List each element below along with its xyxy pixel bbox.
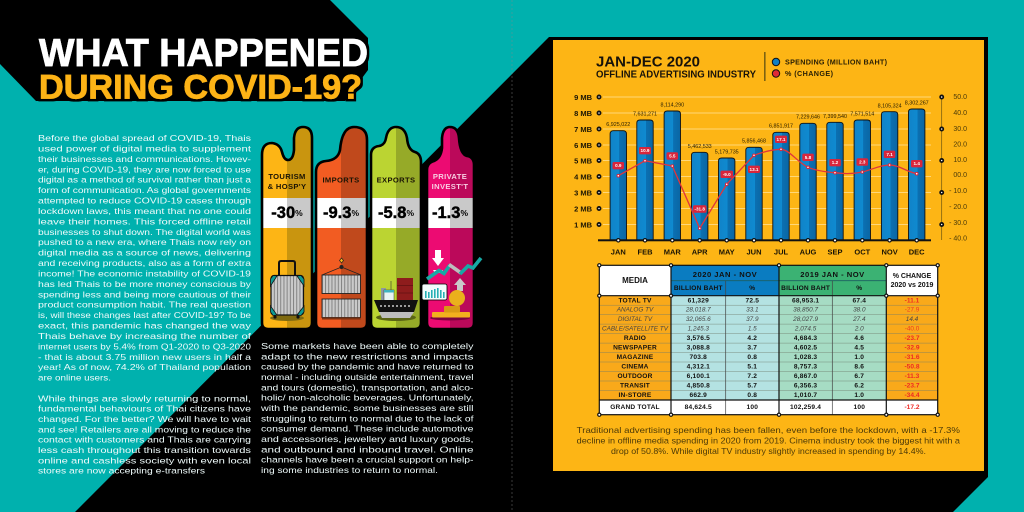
text block: markets paragraph — [260, 341, 474, 475]
label: imports: IMPORTS — [322, 176, 360, 184]
percent change tags: -31.8 — [694, 206, 705, 212]
bar value labels: 5,462,533 — [688, 144, 712, 150]
table rows: 6,356.3 — [794, 382, 817, 390]
left axis labels: 7 MB — [574, 125, 593, 134]
percent change tags: 5.5 — [669, 154, 676, 158]
table rows: 1,010.7 — [794, 392, 817, 399]
text block: COVID-19 digital behaviour, first paragraph: lockdown laws, this meant that no one could — [38, 206, 251, 216]
percent change tags: 10.9 — [641, 148, 650, 153]
percent change tags — [612, 136, 922, 213]
value: exports: -5.8% — [378, 204, 414, 222]
table fills — [599, 265, 938, 415]
table rows: 1.0 — [854, 392, 864, 399]
table rows: 61,329 — [688, 298, 709, 304]
panel: private investment bottle — [422, 120, 481, 335]
bar value labels: 6,851,917 — [769, 124, 793, 130]
table rows: 68,953.1 — [792, 298, 819, 304]
text block: second paragraph: stores are now accepting e-transfers — [38, 466, 205, 476]
table headers: % CHANGE — [893, 273, 932, 280]
percent change tags: 13.1 — [750, 167, 759, 172]
text block: COVID-19 digital behaviour, first paragraph: exact, this pandemic has changed the way — [38, 321, 252, 331]
legend: % (CHANGE) — [785, 69, 834, 78]
text block: COVID-19 digital behaviour, first paragraph: their businesses and communications. Howev- — [38, 154, 251, 164]
right axis: 10.0 — [953, 157, 967, 164]
value: tourism: -30% — [271, 204, 303, 222]
text block: second paragraph: contact with customers and Thais are carrying — [38, 435, 251, 445]
bar value labels: 6,925,022 — [606, 122, 630, 128]
table rows: TOTAL TV — [618, 298, 652, 304]
text block: COVID-19 digital behaviour, first paragraph: is, will these changes last after COVID-19? To be — [38, 310, 251, 320]
text block: COVID-19 digital behaviour, first paragraph: has led Thais to be more money conscious by — [38, 279, 252, 289]
panel: exports bottle — [370, 126, 422, 328]
table rows: 1,245.3 — [688, 326, 709, 333]
label: tourism: & HOSP'Y — [268, 182, 306, 190]
bar value labels: 5,856,468 — [742, 139, 766, 145]
text block: COVID-19 digital behaviour, first paragraph: income! The economic instability of COVID-19 — [38, 268, 251, 278]
table rows: -27.9 — [905, 307, 920, 314]
table rows: 8,757.3 — [794, 364, 817, 370]
title — [39, 32, 368, 106]
table rows: 3.7 — [747, 344, 757, 352]
text block: chart commentary: decline in offline media spending in 2020 from 2019. Cinema industry took the biggest hit with a — [577, 436, 960, 446]
table rows: 1.0 — [854, 354, 864, 361]
label: private investment: PRIVATE — [433, 172, 467, 180]
text block: COVID-19 digital behaviour, first paragraph — [38, 133, 252, 383]
bar value labels: 7,399,540 — [823, 114, 847, 120]
text block: markets paragraph: and tours (domestic), transportation, and alco- — [261, 382, 474, 392]
table rows — [602, 298, 920, 411]
label: exports: EXPORTS — [377, 176, 415, 184]
text block: COVID-19 digital behaviour, first paragraph: attempted to reduce COVID-19 cases through — [38, 196, 251, 206]
table rows: 3,088.8 — [687, 344, 710, 352]
table headers: 2020 vs 2019 — [891, 282, 934, 289]
right axis: - 10.0 — [949, 188, 967, 195]
table headers: % — [856, 285, 862, 292]
title: DURING COVID-19? — [39, 68, 362, 106]
table rows: -40.0 — [905, 326, 920, 333]
table rows: 3,576.5 — [687, 335, 710, 342]
x axis with month labels: JUL — [774, 248, 789, 256]
text block: second paragraph: fundamental behaviours of Thai citizens have — [38, 404, 251, 414]
percent change tags: 2.3 — [859, 160, 866, 164]
bar value labels: 7,229,646 — [796, 115, 820, 121]
data table: media spending 2020 vs 2019 — [598, 264, 939, 416]
table rows: 4,850.8 — [687, 382, 710, 390]
table rows: 38,850.7 — [793, 307, 818, 314]
table rows: 33.1 — [746, 307, 759, 314]
bar value labels: 8,302,267 — [905, 100, 929, 106]
table rows: 703.8 — [690, 354, 707, 361]
text block: markets paragraph: adapt to the new restrictions and impacts — [261, 351, 474, 361]
table rows: 14.4 — [906, 316, 919, 323]
right axis: 00.0 — [953, 172, 967, 179]
panel: tourism and hospitality bottle — [260, 126, 314, 328]
legend: SPENDING (MILLION BAHT) — [785, 58, 888, 67]
right axis: 30.0 — [953, 126, 967, 133]
percent change tags: 7.1 — [886, 152, 893, 157]
text block: COVID-19 digital behaviour, first paragraph: leave their homes. This forced offline retail — [38, 216, 251, 226]
text block: COVID-19 digital behaviour, first paragraph: pushed to a new era, where Thais now rely on — [38, 237, 251, 247]
value: private investment: -1.3% — [432, 204, 468, 222]
text block: markets paragraph: holic/ non-alcoholic beverages. Unfortunately, — [261, 393, 474, 403]
table rows: 4.5 — [854, 344, 864, 352]
table rows: -11.3 — [905, 373, 920, 380]
left axis labels: 1 MB — [574, 220, 593, 230]
left axis labels: 2 MB — [574, 204, 593, 214]
table rows: 4.2 — [747, 335, 757, 342]
left axis labels: 4 MB — [574, 172, 593, 182]
text block: markets paragraph: struggling to return to normal due to the lack of — [261, 413, 474, 423]
table rows: MAGAZINE — [617, 354, 654, 361]
value: imports: -9.3% — [323, 204, 359, 222]
icon: investment trend chart and coins — [422, 250, 481, 320]
table rows: 102,259.4 — [790, 404, 821, 411]
text block: COVID-19 digital behaviour, first paragraph: Thais behave by increasing the number of — [38, 331, 252, 341]
text block: markets paragraph: Some markets have been able to completely — [261, 341, 474, 351]
text block: COVID-19 digital behaviour, first paragraph: form of communication. As global governments — [38, 185, 251, 195]
left axis labels: 9 MB — [574, 93, 593, 102]
table rows: 38.0 — [853, 307, 866, 314]
table rows: ANALOG TV — [616, 307, 654, 314]
label: private investment: INVEST'T — [432, 182, 468, 190]
text block: markets paragraph: channels have been a crucial support on help- — [261, 455, 474, 465]
table rows: -23.7 — [904, 382, 920, 390]
table rows: NEWSPAPER — [613, 344, 657, 352]
bars — [610, 109, 925, 240]
text block: chart commentary: drop of 50.8%. While digital TV industry slightly increased in spending by 14.4%. — [611, 446, 926, 456]
chart heading — [596, 54, 756, 80]
x axis with month labels: AUG — [800, 248, 816, 256]
table rows: 32,065.6 — [686, 316, 711, 323]
right axis: 20.0 — [953, 142, 967, 148]
table rows: DIGITAL TV — [618, 316, 653, 323]
icon: hanging cargo containers — [322, 258, 361, 320]
text block: COVID-19 digital behaviour, first paragraph: - that is about 3.75 million new users in half a — [38, 352, 251, 362]
text block: second paragraph: less cash throughout this transition towards — [38, 445, 251, 455]
text block: chart commentary — [577, 425, 960, 456]
table rows: 67.4 — [852, 298, 866, 304]
table rows: -11.1 — [905, 298, 920, 304]
table rows: -17.2 — [904, 404, 920, 411]
text block: second paragraph: changed. For the better? We will have to wait — [38, 414, 252, 424]
table rows: 7.2 — [747, 373, 757, 380]
right axis: - 30.0 — [949, 220, 967, 227]
bar value labels: 7,571,514 — [850, 111, 874, 117]
table rows: 2.0 — [854, 326, 864, 333]
text block: second paragraph: online and cashless society with even local — [38, 455, 251, 465]
left axis labels: 3 MB — [574, 188, 593, 198]
left axis labels: 6 MB — [574, 141, 593, 150]
table headers: % — [749, 285, 755, 292]
text block: markets paragraph: and accessories, jewellery and luxury goods, — [261, 434, 474, 444]
x axis with month labels: FEB — [638, 248, 653, 256]
table rows: CABLE/SATELLITE TV — [602, 326, 669, 333]
right axis — [940, 94, 967, 242]
table rows: 100 — [746, 404, 758, 411]
text block: COVID-19 digital behaviour, first paragraph: are online users. — [38, 373, 111, 383]
text block: COVID-19 digital behaviour, first paragraph: spending less and being more cautious of their — [38, 289, 251, 299]
table rows: 4,312.1 — [687, 364, 710, 370]
table rows: 4.6 — [854, 335, 864, 342]
table headers: BILLION BAHT — [781, 285, 830, 292]
label: tourism: TOURISM — [268, 172, 306, 180]
table rows: GRAND TOTAL — [610, 404, 660, 411]
table headers: 2019 JAN - NOV — [800, 270, 865, 279]
table headers — [622, 270, 934, 292]
percent change line — [617, 148, 918, 230]
table rows: 6,867.0 — [794, 373, 817, 380]
percent change tags: -9.0 — [723, 172, 731, 177]
combo chart: spending bars and percent change line — [574, 93, 967, 256]
text block: markets paragraph: ing some industries to return to normal. — [261, 465, 438, 475]
left axis labels: 5 MB — [574, 156, 593, 166]
x axis with month labels: DEC — [909, 248, 925, 256]
text block: markets paragraph: and outbound and inbound travel. Online — [261, 444, 474, 454]
text block: markets paragraph: caused by the pandemic and have returned to — [261, 362, 474, 372]
percent change tags: 1.4 — [914, 161, 920, 166]
table rows: 5.7 — [747, 382, 757, 390]
table rows: 37.9 — [746, 316, 759, 323]
table rows: -31.6 — [904, 354, 920, 361]
percent change tags: 0.9 — [615, 163, 622, 168]
text block: COVID-19 digital behaviour, first paragraph: Before the global spread of COVID-19, Thais — [38, 133, 251, 143]
x axis with month labels: OCT — [854, 248, 871, 256]
table rows: IN-STORE — [618, 392, 652, 399]
percent change tags: 17.1 — [777, 137, 786, 142]
table rows: 6,100.1 — [687, 373, 710, 380]
background: black title block — [0, 0, 368, 101]
text block: COVID-19 digital behaviour, first paragraph: and receiving products, also as a form of extra — [38, 258, 251, 268]
text block: markets paragraph: normal - including outside entertainment, travel — [261, 372, 474, 382]
table rows: -32.9 — [904, 344, 920, 352]
left axis labels: 8 MB — [574, 109, 593, 118]
x axis with month labels: APR — [692, 248, 708, 256]
bar value labels — [606, 100, 929, 156]
table rows: 0.8 — [747, 354, 757, 361]
table rows: 72.5 — [745, 298, 759, 304]
x axis with month labels: SEP — [827, 248, 843, 256]
table headers: BILLION BAHT — [674, 285, 723, 292]
text block: second paragraph: and see! Retailers are all moving to reduce the — [38, 424, 251, 434]
text block: second paragraph — [38, 393, 252, 476]
right axis: 40.0 — [953, 110, 967, 117]
text block: COVID-19 digital behaviour, first paragraph: internet users by 5.4% from Q1-2020 to Q3-2020 — [38, 341, 251, 351]
table rows: 662.9 — [690, 392, 707, 399]
table rows: TRANSIT — [620, 382, 650, 390]
table rows: 8.6 — [854, 364, 864, 370]
table rows: -34.4 — [904, 392, 920, 399]
x axis with month labels — [598, 239, 931, 256]
table rows: 6.2 — [854, 382, 864, 390]
percent change tags: 1.2 — [832, 160, 839, 165]
text block: markets paragraph: with the pandemic, some businesses are still — [260, 403, 474, 413]
right axis: 50.0 — [953, 94, 967, 101]
text block: COVID-19 digital behaviour, first paragraph: year! As of now, 74.2% of Thailand population — [38, 362, 251, 372]
table rows: 1.5 — [748, 326, 757, 333]
text block: second paragraph: While things are slowly returning to normal, — [38, 393, 251, 403]
right axis: - 20.0 — [949, 204, 967, 211]
table rows: 0.8 — [747, 392, 757, 399]
table rows: RADIO — [624, 335, 646, 342]
text block: COVID-19 digital behaviour, first paragraph: used power of digital media to supplement — [38, 143, 252, 153]
table rows: 28,018.7 — [685, 307, 711, 314]
chart heading: JAN-DEC 2020 — [596, 54, 700, 70]
table rows: 5.1 — [747, 364, 757, 370]
text block: COVID-19 digital behaviour, first paragraph: er, during COVID-19, they are now forced to use — [38, 164, 251, 174]
x axis with month labels: MAY — [719, 248, 735, 256]
table rows: 6.7 — [854, 373, 864, 380]
icon: cargo ship — [374, 278, 418, 321]
text block: COVID-19 digital behaviour, first paragraph: product consumption habit. The real question — [38, 300, 251, 310]
text block: markets paragraph: consumer demand. These include automotive — [261, 424, 474, 434]
x axis with month labels: JAN — [611, 248, 626, 256]
table rows: 4,684.3 — [794, 335, 817, 342]
table rows: 100 — [853, 404, 865, 411]
right axis: - 40.0 — [949, 236, 967, 242]
bar value labels: 8,114,290 — [661, 103, 684, 109]
text block: COVID-19 digital behaviour, first paragraph: digital media as a source of news, delivering — [38, 248, 251, 258]
table rows: 2,074.5 — [794, 326, 817, 333]
title: WHAT HAPPENED — [39, 32, 368, 75]
table rows: OUTDOOR — [617, 373, 653, 380]
icon: suitcase — [270, 261, 304, 321]
table rows: 4,602.5 — [794, 344, 817, 352]
table rows: 28,027.9 — [792, 316, 818, 323]
text block: chart commentary: Traditional advertising spending has been fallen, even before the lockdown, with a -17.3% — [577, 425, 960, 435]
bar value labels: 7,631,271 — [633, 112, 657, 118]
bar value labels: 8,105,324 — [878, 103, 902, 109]
text block: COVID-19 digital behaviour, first paragraph: businesses to shut down. The digital world was — [38, 227, 251, 237]
x axis with month labels: NOV — [881, 248, 898, 256]
table rows: 27.4 — [852, 316, 866, 323]
chart heading: OFFLINE ADVERTISING INDUSTRY — [596, 70, 756, 80]
bar value labels: 5,179,735 — [715, 150, 739, 156]
left axis labels — [574, 93, 601, 230]
table headers: 2020 JAN - NOV — [693, 270, 758, 279]
table headers: MEDIA — [622, 276, 648, 285]
x axis with month labels: MAR — [664, 248, 681, 256]
panel: offline advertising chart and table — [553, 40, 984, 471]
table rows: -23.7 — [904, 335, 920, 342]
panel: imports bottle — [314, 126, 368, 328]
table rows: 84,624.5 — [685, 404, 712, 411]
text block: COVID-19 digital behaviour, first paragraph: digital as a method of survival rather than just a — [38, 175, 251, 185]
legend — [764, 52, 888, 81]
table rows: CINEMA — [621, 364, 649, 370]
table rows: -50.8 — [904, 364, 920, 370]
table rows: 1,028.3 — [794, 354, 817, 361]
x axis with month labels: JUN — [746, 248, 762, 256]
percent change tags: 5.8 — [805, 155, 812, 160]
